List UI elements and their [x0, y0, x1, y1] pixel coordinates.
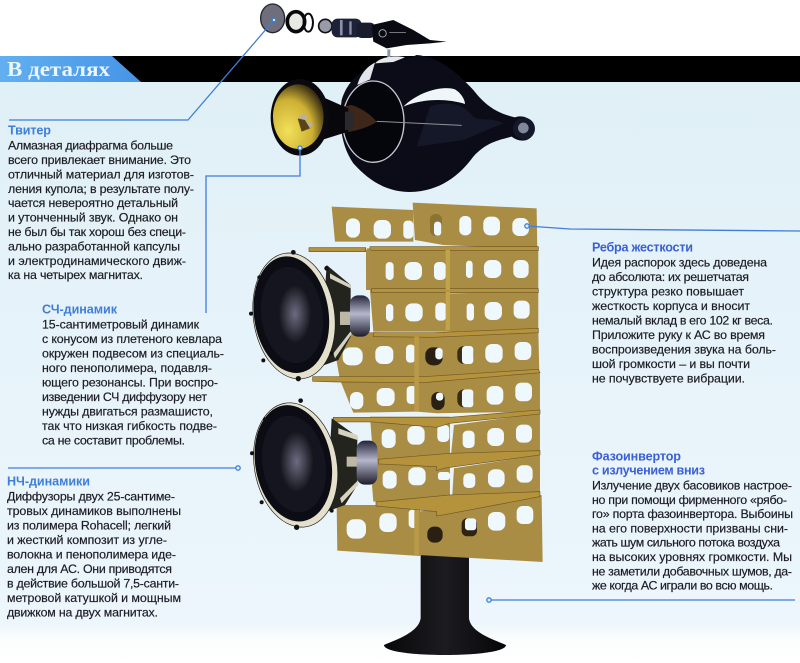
- text block: tweeter: не был бы так хорош без специ-: [8, 225, 186, 239]
- tweeter exploded parts: [261, 4, 447, 48]
- text block: tweeter: ка на четырех магнитах.: [8, 268, 143, 282]
- front-right rib column: [413, 203, 543, 562]
- leader line: midrange: [206, 146, 302, 313]
- text block: woofers: движком на двух магнитах.: [7, 606, 158, 620]
- text block: bass reflex port: на его поверхности призваны сни-: [592, 521, 788, 535]
- text block: midrange: ного пенополимера, подавля-: [42, 361, 212, 375]
- text block: midrange: с конусом из плетеного кевлара: [42, 332, 222, 346]
- text block: stiffening ribs: не почувствуете вибрации.: [592, 372, 745, 386]
- text block: woofers: в действие большой 7,5-санти-: [7, 576, 179, 590]
- text block: tweeter: всего привлекает внимание. Это: [8, 153, 191, 167]
- text block: tweeter: ления купола; в результате полу-: [8, 182, 194, 196]
- midrange driver: [271, 79, 353, 156]
- leader line: bass port: [487, 598, 795, 602]
- text block: midrange: са не составит проблемы.: [42, 434, 185, 448]
- text block: stiffening ribs: жесткость корпуса и вносит: [592, 299, 750, 313]
- text block: stiffening ribs: Идея распорок здесь доведена: [592, 256, 767, 270]
- text block: midrange: СЧ-динамик: [42, 302, 118, 316]
- text block: stiffening ribs: структура резко повышает: [592, 284, 744, 298]
- text block: stiffening ribs: до абсолюта: их решетчатая: [592, 270, 749, 284]
- text block: woofers: метровой катушкой и мощным: [7, 591, 181, 605]
- text block: midrange: [42, 302, 224, 448]
- text block: bass reflex port: же когда АС играли во всю мощь.: [592, 579, 773, 593]
- text block: tweeter: отличный материал для изготов-: [8, 167, 194, 181]
- text block: bass reflex port: Фазоинвертор: [592, 450, 681, 464]
- text block: woofers: тровых динамиков выполнены: [7, 504, 181, 518]
- text block: bass reflex port: Излучение двух басовиков настрое-: [592, 478, 792, 492]
- cabinet lattice with stiffening ribs: [244, 203, 543, 655]
- upper woofer: [245, 248, 370, 384]
- midrange enclosure: [337, 49, 535, 192]
- text block: midrange: так что низкая гибкость подве-: [42, 419, 217, 433]
- heading tab: В деталях: [0, 56, 141, 82]
- leader line: tweeter: [9, 18, 276, 120]
- text block: stiffening ribs: Приложите руку к АС во время: [592, 328, 765, 342]
- text block: woofers: Диффузоры двух 25-сантиме-: [7, 490, 175, 504]
- text block: tweeter: [8, 124, 194, 282]
- text block: tweeter: и электродинамического движ-: [8, 254, 186, 268]
- leader line: ribs: [525, 224, 800, 231]
- text block: stiffening ribs: [592, 240, 776, 386]
- text block: bass reflex port: [592, 450, 793, 593]
- stand and base: [384, 555, 506, 655]
- text block: bass reflex port: го» порта фазоинвертора. Выбоины: [592, 507, 793, 521]
- text block: stiffening ribs: немалый вклад в его 102 кг веса.: [592, 314, 773, 328]
- text block: tweeter: Твитер: [8, 124, 51, 138]
- leader line: woofers: [8, 466, 240, 470]
- text block: bass reflex port: не заметили добавочных шумов, да-: [592, 564, 792, 578]
- text block: stiffening ribs: воспроизведения звука на боль-: [592, 342, 776, 356]
- horizontal shelves: [309, 247, 540, 555]
- text block: woofers: НЧ-динамики: [7, 474, 90, 488]
- text block: stiffening ribs: шой громкости – и вы почти: [592, 357, 750, 371]
- text block: woofers: волокна и пенополимера иде-: [7, 548, 176, 562]
- text block: bass reflex port: жать шум сильного потока воздуха: [592, 536, 780, 550]
- text block: midrange: изведении СЧ диффузору нет: [42, 390, 207, 404]
- text block: woofers: из полимера Rohacell; легкий: [7, 518, 171, 532]
- text block: tweeter: ально разработанной капсулы: [8, 239, 180, 253]
- heading tab: В деталях: В деталях: [7, 57, 111, 81]
- text block: woofers: ален для АС. Они приводятся: [7, 562, 172, 576]
- text block: bass reflex port: на высоких уровнях громкости. Мы: [592, 550, 792, 564]
- text block: midrange: 15-сантиметровый динамик: [42, 318, 200, 332]
- text block: tweeter: Алмазная диафрагма больше: [8, 138, 173, 152]
- text block: woofers: и жесткий композит из угле-: [7, 533, 167, 547]
- lower woofer: [244, 396, 377, 534]
- text block: tweeter: чается невероятно детальный: [8, 196, 178, 210]
- text block: bass reflex port: с излучением вниз: [592, 464, 705, 478]
- black header band: [110, 56, 800, 82]
- text block: bass reflex port: но при помощи фирменного «рябо-: [592, 493, 787, 507]
- text block: midrange: нужды двигаться размашисто,: [42, 404, 213, 418]
- text block: stiffening ribs: Ребра жесткости: [592, 240, 693, 254]
- text block: midrange: окружен подвесом из специаль-: [42, 346, 224, 360]
- text block: midrange: ющего резонансы. При воспро-: [42, 376, 218, 390]
- text block: tweeter: и утонченный звук. Однако он: [8, 210, 178, 224]
- back-left rib column: [332, 207, 450, 556]
- text block: woofers: [7, 474, 181, 620]
